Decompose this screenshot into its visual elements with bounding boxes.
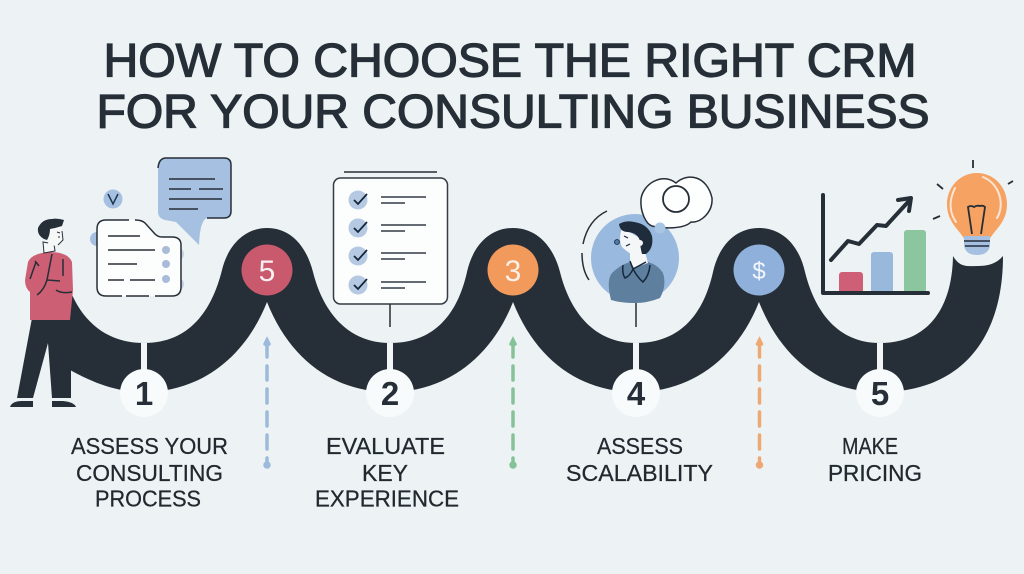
blue dollar peak marker: $ — [752, 258, 766, 285]
icon: thinking person — [10, 219, 76, 407]
label: step 4: SCALABILITY — [566, 460, 713, 486]
blue dollar peak marker — [734, 244, 784, 296]
label: step 1: PROCESS — [95, 486, 201, 512]
orange peak marker — [488, 244, 538, 296]
label: step 2 — [315, 433, 459, 512]
winding road band — [70, 228, 1003, 392]
label: step 1: ASSESS YOUR — [71, 433, 228, 459]
icon: document note — [90, 220, 184, 296]
label: step 5 — [828, 433, 922, 486]
step 1 badge — [120, 343, 168, 417]
step 2 badge — [366, 343, 414, 417]
label: step 1 — [71, 433, 228, 512]
step 1 badge: 1 — [135, 375, 153, 412]
label: step 2: EXPERIENCE — [315, 486, 459, 512]
step 5 badge: 5 — [871, 375, 889, 412]
pink peak marker: 5 — [259, 255, 275, 288]
label: step 2: EVALUATE — [326, 433, 445, 459]
step 2 badge: 2 — [381, 375, 399, 412]
icon: person with thought bubble — [582, 177, 712, 327]
step 4 badge — [612, 343, 660, 417]
icon: lightbulb — [933, 160, 1013, 255]
dashed arrow orange — [758, 340, 762, 467]
icon: checklist — [334, 172, 448, 327]
label: step 5: MAKE — [842, 433, 898, 459]
title: HOW TO CHOOSE THE RIGHT CRM — [104, 34, 916, 86]
pink peak marker — [242, 244, 292, 296]
label: step 1: CONSULTING — [76, 460, 223, 486]
title — [96, 34, 930, 138]
title: FOR YOUR CONSULTING BUSINESS — [96, 84, 930, 138]
label: step 4: ASSESS — [597, 433, 683, 459]
orange peak marker: 3 — [505, 255, 521, 288]
step 4 badge: 4 — [627, 375, 646, 412]
dashed arrow green — [511, 340, 515, 467]
bar chart with rising arrow — [823, 195, 928, 293]
label: step 2: KEY — [362, 460, 408, 486]
icon: blue speech bubble — [158, 158, 231, 245]
step 5 badge — [856, 343, 904, 417]
dashed arrow blue — [265, 340, 269, 467]
label: step 5: PRICING — [828, 460, 922, 486]
label: step 4 — [566, 433, 713, 486]
icon: V badge — [104, 190, 122, 208]
